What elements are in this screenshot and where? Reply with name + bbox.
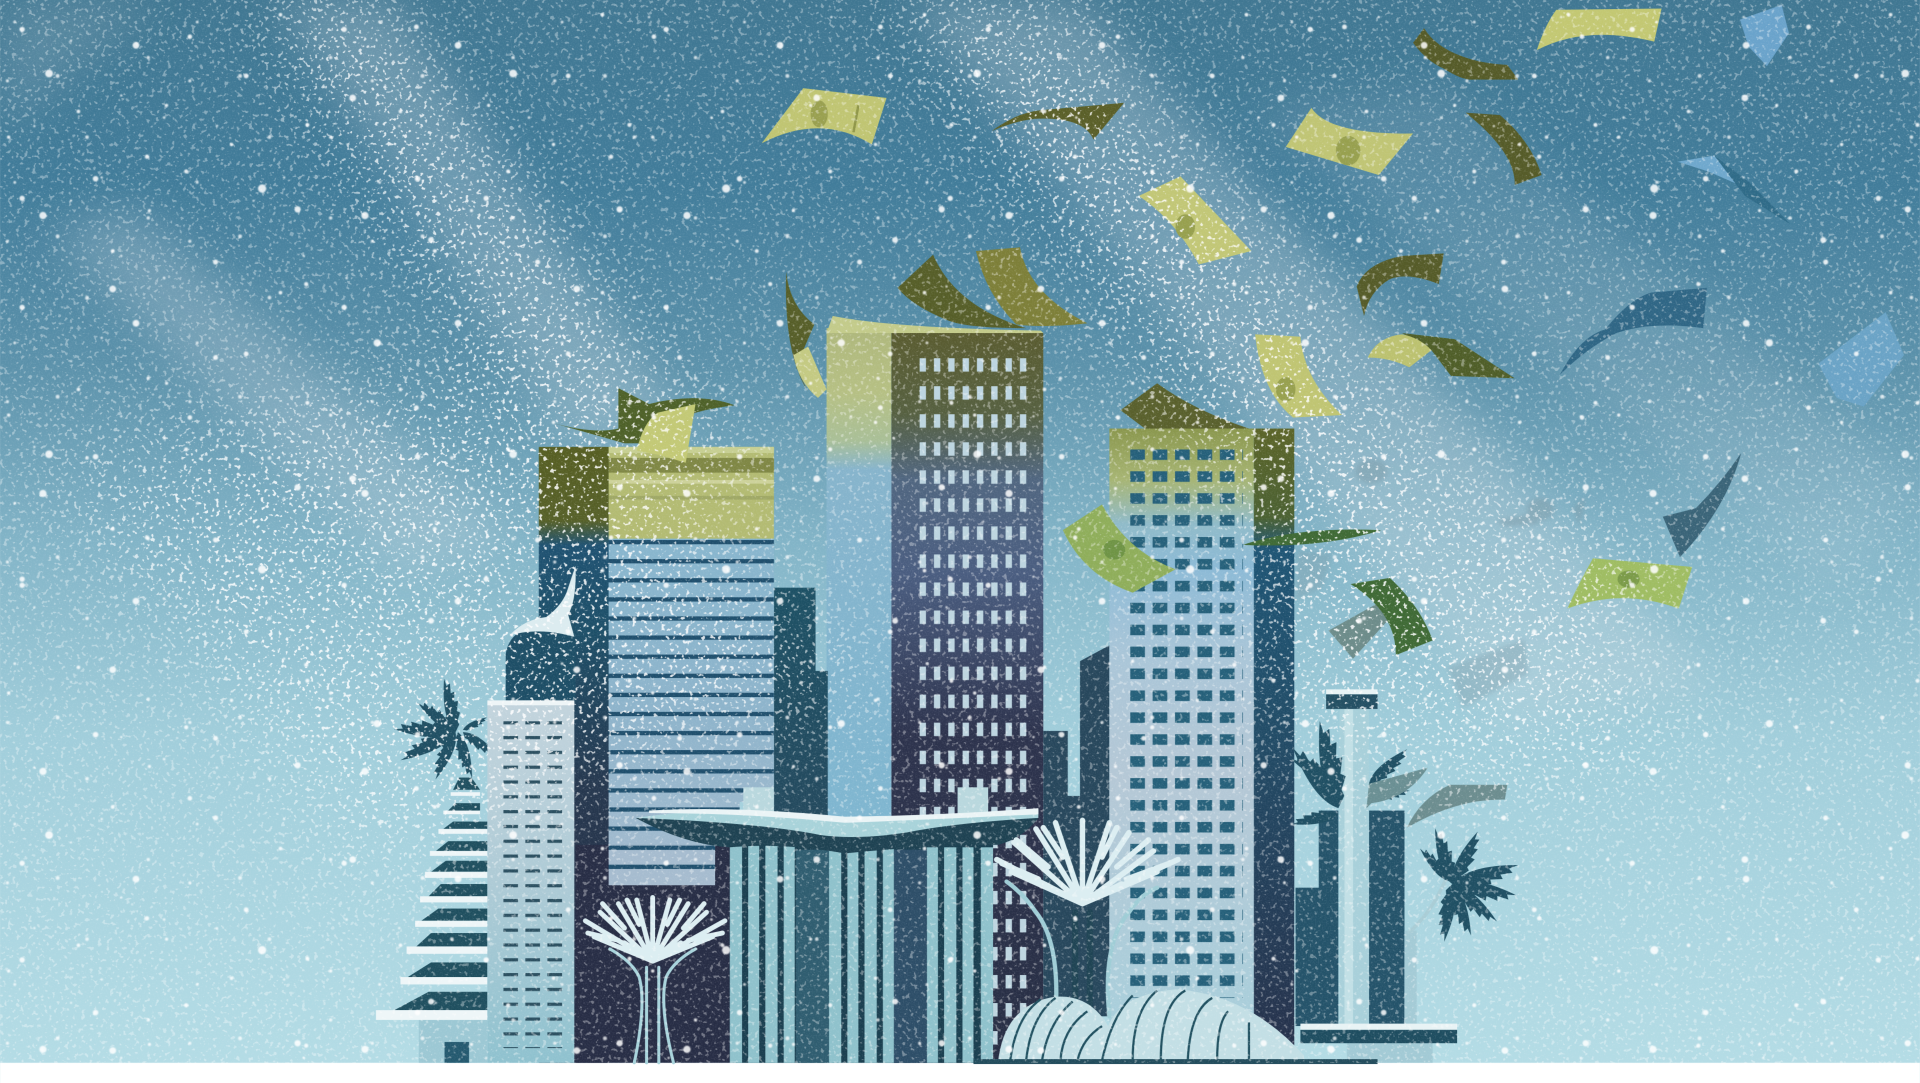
banknote: dark blue [1560,288,1707,375]
banknote: blue with dark fold [1678,156,1790,224]
building: centre tower [827,316,1043,1063]
banknote: above right tower [1120,383,1249,429]
building: left tower with olive top [539,447,774,1063]
banknote: dark curved right [1466,113,1542,185]
faint banknotes in the distance [1295,459,1586,708]
banknote: green by right tower [1063,504,1175,593]
pagoda [376,778,487,1063]
banknote: light diagonal [1139,176,1251,264]
banknote: green lower right [1567,558,1692,609]
banknotes: green and grey folded [1329,578,1433,659]
building: white tower with dome [487,566,576,1063]
skyline: back buildings [774,328,1109,1016]
greenhouse domes [973,989,1378,1064]
banknote: blue top right [1740,5,1789,66]
banknotes: left of centre tower [786,272,827,398]
palm tree: top of pagoda [393,677,499,781]
banknotes: pair over centre tower [898,247,1087,328]
dark blocks beside right tower [1043,645,1109,1016]
banknote: light centre right [1286,108,1413,175]
dark block beside left tower [774,588,828,820]
palm tree: right [1408,826,1521,943]
banknote: light, top left [762,88,887,144]
banknote: dark sliver [1663,453,1741,557]
banknote: faint blue right [1818,312,1904,407]
back light tower [827,328,891,818]
ground strip [0,1063,1920,1083]
building: right tower [1109,429,1294,1063]
banknote: dark curled middle [1357,253,1444,316]
banknote: grey arc [1407,785,1507,828]
banknotes: above left tower [551,388,735,463]
banknote: dark top [1413,28,1518,80]
banknote: green sliver [1243,530,1381,545]
supertree: left [585,898,725,1063]
banknote: light top right [1537,9,1662,50]
hotel: towers and roof deck [636,787,1038,1063]
banknote: dark curled [992,103,1124,140]
banknote: light tall [1255,334,1342,418]
diagonal light streaks [0,0,1920,722]
supertree: right [997,820,1178,1016]
building: spire tower and blocks [1295,689,1457,1063]
banknote: folded pair [1368,333,1515,378]
palm tree: behind spire [1288,718,1428,828]
